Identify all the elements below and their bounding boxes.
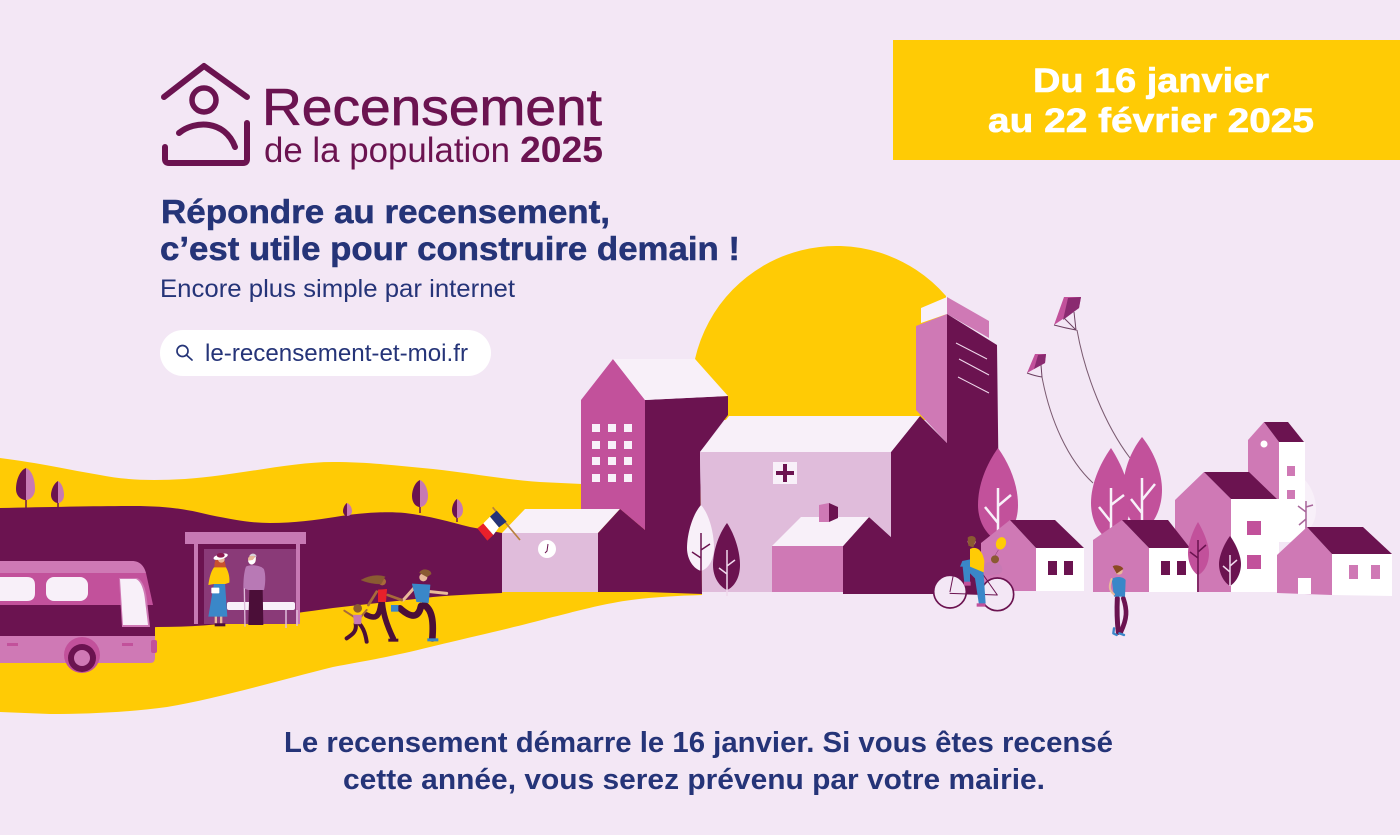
logo: Recensement de la population 2025: de la population [264, 131, 510, 170]
people waiting at shelter [208, 552, 265, 627]
logo: Recensement de la population 2025: Recensement [262, 79, 603, 137]
bottom message: cette année, vous serez prévenu par votre mairie. [343, 764, 1045, 796]
clock [538, 540, 556, 558]
kite 2 [1027, 354, 1093, 483]
white and dark trees [687, 505, 740, 596]
date banner: Du 16 janvier [1033, 62, 1269, 100]
bus [0, 561, 157, 673]
kite 1 [1054, 297, 1130, 458]
headline [160, 193, 740, 267]
search pill [160, 330, 491, 376]
house 2 [1093, 520, 1197, 592]
bottom message: Le recensement démarre le 16 janvier. Si vous êtes recensé [284, 727, 1113, 759]
medical cross sign [773, 462, 797, 484]
house 1 [981, 520, 1084, 591]
small trees by big house [1188, 522, 1241, 592]
logo: Recensement de la population 2025: 2025 [520, 129, 603, 170]
elderly man with cane [243, 554, 265, 627]
logo: Recensement de la population 2025 [164, 66, 603, 170]
running woman [361, 575, 402, 642]
subheading: Encore plus simple par internet [160, 275, 515, 303]
man on roller skates [391, 570, 447, 641]
headline: c’est utile pour construire demain ! [160, 230, 740, 267]
yellow landscape band [0, 458, 702, 714]
small house in front of hospital [772, 503, 869, 592]
woman with hat [208, 552, 230, 626]
walking woman [1110, 565, 1126, 635]
date banner: au 22 février 2025 [988, 102, 1314, 140]
white tree behind last house [1298, 480, 1316, 532]
bus wheel [64, 637, 100, 673]
hospital building [700, 416, 920, 592]
house 5 [1277, 527, 1392, 596]
bus shelter [185, 532, 306, 628]
icon: house with person [164, 66, 247, 163]
tall pink building [581, 359, 728, 594]
running family [344, 570, 447, 642]
building windows [592, 424, 632, 482]
small clock building [502, 509, 646, 592]
sun [695, 246, 947, 420]
headline: Répondre au recensement, [161, 193, 610, 230]
icon: magnifier [177, 346, 192, 360]
pink trees [978, 437, 1162, 545]
skyscraper [843, 297, 1000, 594]
flag [477, 507, 520, 541]
search pill: le-recensement-et-moi.fr [205, 340, 468, 367]
cyclist with child and balloon [934, 536, 1014, 611]
running girl [344, 604, 367, 642]
big house [1175, 472, 1279, 592]
small trees on hill [16, 468, 463, 522]
date banner [893, 40, 1400, 160]
dark hill [0, 506, 502, 640]
bottom message [284, 727, 1113, 796]
tower house [1248, 422, 1305, 542]
kites [1027, 297, 1130, 483]
bus windows [0, 577, 150, 627]
